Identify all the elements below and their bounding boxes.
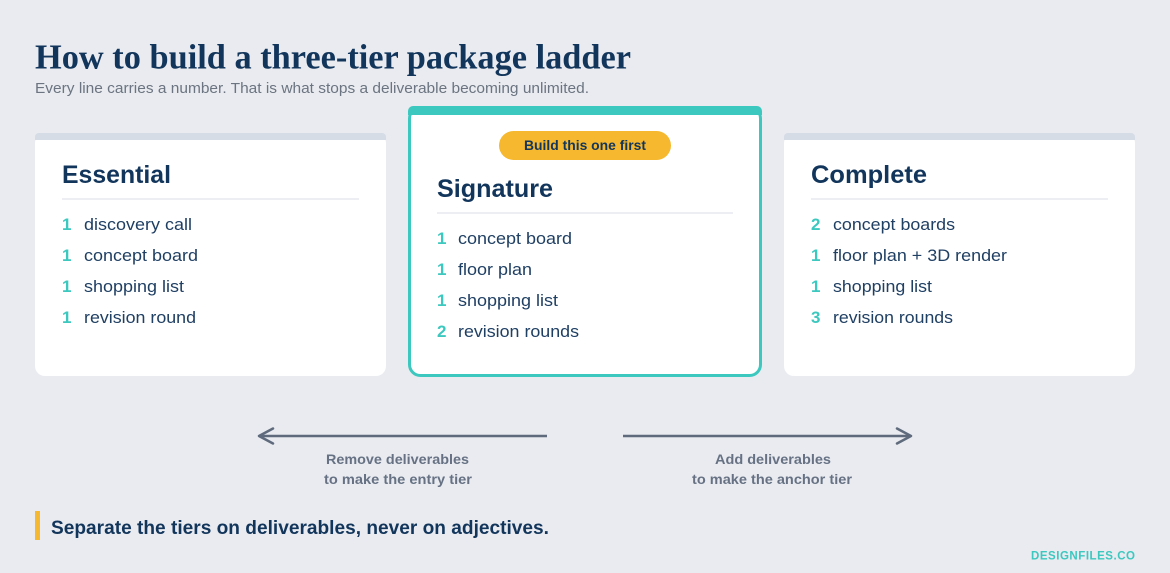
arrow: remove deliverables [259, 428, 547, 444]
badge: build this one first: Build this one first [524, 137, 646, 153]
panel: Signature: concept board [458, 229, 572, 248]
panel: Essential: discovery call [84, 215, 192, 234]
panel: Essential: revision round [84, 308, 196, 327]
panel: Complete: concept boards [833, 215, 955, 234]
callout [35, 511, 549, 540]
panel: Complete: floor plan + 3D render [833, 246, 1007, 265]
panel: Essential: 1 [62, 246, 71, 265]
label: add deliverables: Add deliverables [715, 451, 831, 467]
label: remove deliverables [324, 451, 473, 487]
panel: Complete: shopping list [833, 277, 932, 296]
panel: Essential: Essential [62, 161, 171, 189]
panel: Signature: 1 [437, 229, 446, 248]
subtitle: Every line carries a number. That is what stops a deliverable becoming unlimited. [35, 80, 589, 97]
label: add deliverables [692, 451, 853, 487]
panel: Complete [784, 133, 1135, 376]
panel: Signature: Signature [437, 175, 553, 203]
panel: Essential: 1 [62, 308, 71, 327]
panel: Essential: shopping list [84, 277, 184, 296]
panel: Essential: 1 [62, 277, 71, 296]
panel: Essential [35, 133, 386, 376]
callout: Separate the tiers on deliverables, never on adjectives. [51, 518, 549, 539]
title: How to build a three-tier package ladder [35, 38, 631, 76]
panel: Signature: 2 [437, 322, 446, 341]
panel: Complete: revision rounds [833, 308, 953, 327]
panel: Complete: Complete [811, 161, 927, 189]
label: remove deliverables: to make the entry tier [324, 471, 473, 487]
label: add deliverables: to make the anchor tier [692, 471, 853, 487]
brand mark: DESIGNFILES.CO [1031, 550, 1135, 562]
badge: build this one first [499, 131, 671, 160]
panel: Complete: 3 [811, 308, 820, 327]
arrow: add deliverables [623, 428, 911, 444]
panel: Signature: revision rounds [458, 322, 579, 341]
panel: Signature: 1 [437, 260, 446, 279]
label: remove deliverables: Remove deliverables [326, 451, 469, 467]
panel: Essential: 1 [62, 215, 71, 234]
panel: Signature: shopping list [458, 291, 558, 310]
panel: Signature: floor plan [458, 260, 532, 279]
panel: Essential: concept board [84, 246, 198, 265]
panel: Signature: 1 [437, 291, 446, 310]
panel: Complete: 1 [811, 246, 820, 265]
panel: Complete: 1 [811, 277, 820, 296]
panel: Complete: 2 [811, 215, 820, 234]
panel: Signature [408, 106, 762, 376]
